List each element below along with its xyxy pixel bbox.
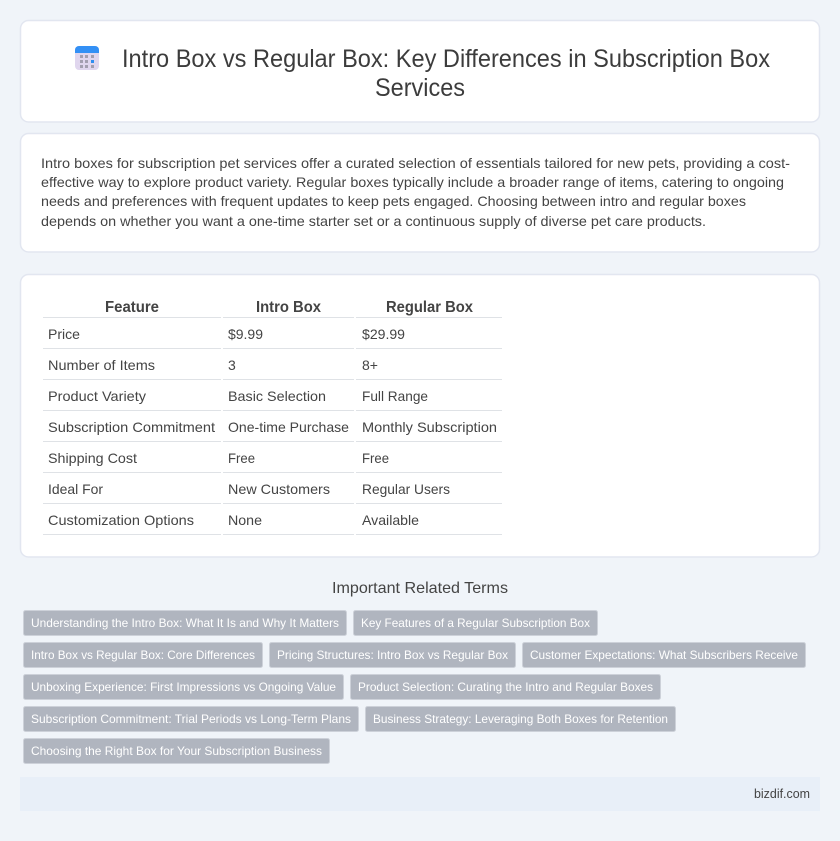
- table rows: 8+: [362, 357, 378, 373]
- table header: Feature: [105, 299, 159, 316]
- table rows: Full Range: [362, 388, 428, 404]
- table rows: Product Variety: [48, 388, 146, 404]
- description text: [41, 155, 790, 229]
- table rows: Monthly Subscription: [362, 419, 497, 435]
- related term tags: Key Features of a Regular Subscription Box: [361, 616, 590, 630]
- related term tags: Understanding the Intro Box: What It Is and Why It Matters: [31, 616, 339, 630]
- panel: description: [20, 134, 820, 252]
- title: Intro Box vs Regular Box: Key Differences in Subscription Box: [122, 45, 770, 73]
- related term tags: Pricing Structures: Intro Box vs Regular Box: [277, 648, 508, 662]
- table rows: New Customers: [228, 481, 330, 497]
- table header: Intro Box: [256, 299, 321, 316]
- table rows: [43, 317, 502, 535]
- footer: [20, 777, 820, 811]
- related term tags: [24, 610, 806, 764]
- related term tags: Business Strategy: Leveraging Both Boxes for Retention: [373, 712, 668, 726]
- related term tags: Intro Box vs Regular Box: Core Differences: [31, 648, 255, 662]
- table rows: Customization Options: [48, 512, 194, 528]
- table rows: Shipping Cost: [48, 450, 137, 466]
- footer: bizdif.com: [754, 787, 810, 801]
- related term tags: Subscription Commitment: Trial Periods vs Long-Term Plans: [31, 712, 351, 726]
- title: [122, 45, 770, 102]
- related term tags: Customer Expectations: What Subscribers Receive: [530, 648, 798, 662]
- table rows: One-time Purchase: [228, 419, 349, 435]
- related term tags: Product Selection: Curating the Intro and Regular Boxes: [358, 680, 653, 694]
- description text: depends on whether you want a one-time starter set or a continuous supply of diverse pet care products.: [41, 213, 706, 229]
- table rows: None: [228, 512, 262, 528]
- table rows: Available: [362, 512, 419, 528]
- heading: important related terms: Important Related Terms: [332, 580, 508, 597]
- icon: calendar box: [75, 46, 99, 70]
- table rows: 3: [228, 357, 236, 373]
- table rows: Price: [48, 326, 80, 342]
- table header: [105, 299, 473, 316]
- description text: Intro boxes for subscription pet services offer a curated selection of essentials tailored for new pets, providing a cost-: [41, 155, 790, 171]
- description text: effective way to explore product variety. Regular boxes typically include a broader range of items, catering to ongoing: [41, 174, 784, 190]
- related term tags: Unboxing Experience: First Impressions vs Ongoing Value: [31, 680, 336, 694]
- panel: title card: [20, 20, 820, 122]
- table rows: Regular Users: [362, 481, 450, 497]
- table rows: Basic Selection: [228, 388, 326, 404]
- table rows: Ideal For: [48, 481, 103, 497]
- table rows: Free: [228, 450, 255, 466]
- table rows: Number of Items: [48, 357, 155, 373]
- related term tags: Choosing the Right Box for Your Subscription Business: [31, 744, 322, 758]
- description text: needs and preferences with frequent updates to keep pets engaged. Choosing between intro and regular boxes: [41, 193, 746, 209]
- title: Services: [375, 74, 465, 102]
- table header: Regular Box: [386, 299, 473, 316]
- table rows: $29.99: [362, 326, 405, 342]
- panel: comparison table: [20, 274, 820, 557]
- table rows: Free: [362, 450, 389, 466]
- table rows: Subscription Commitment: [48, 419, 215, 435]
- table rows: $9.99: [228, 326, 263, 342]
